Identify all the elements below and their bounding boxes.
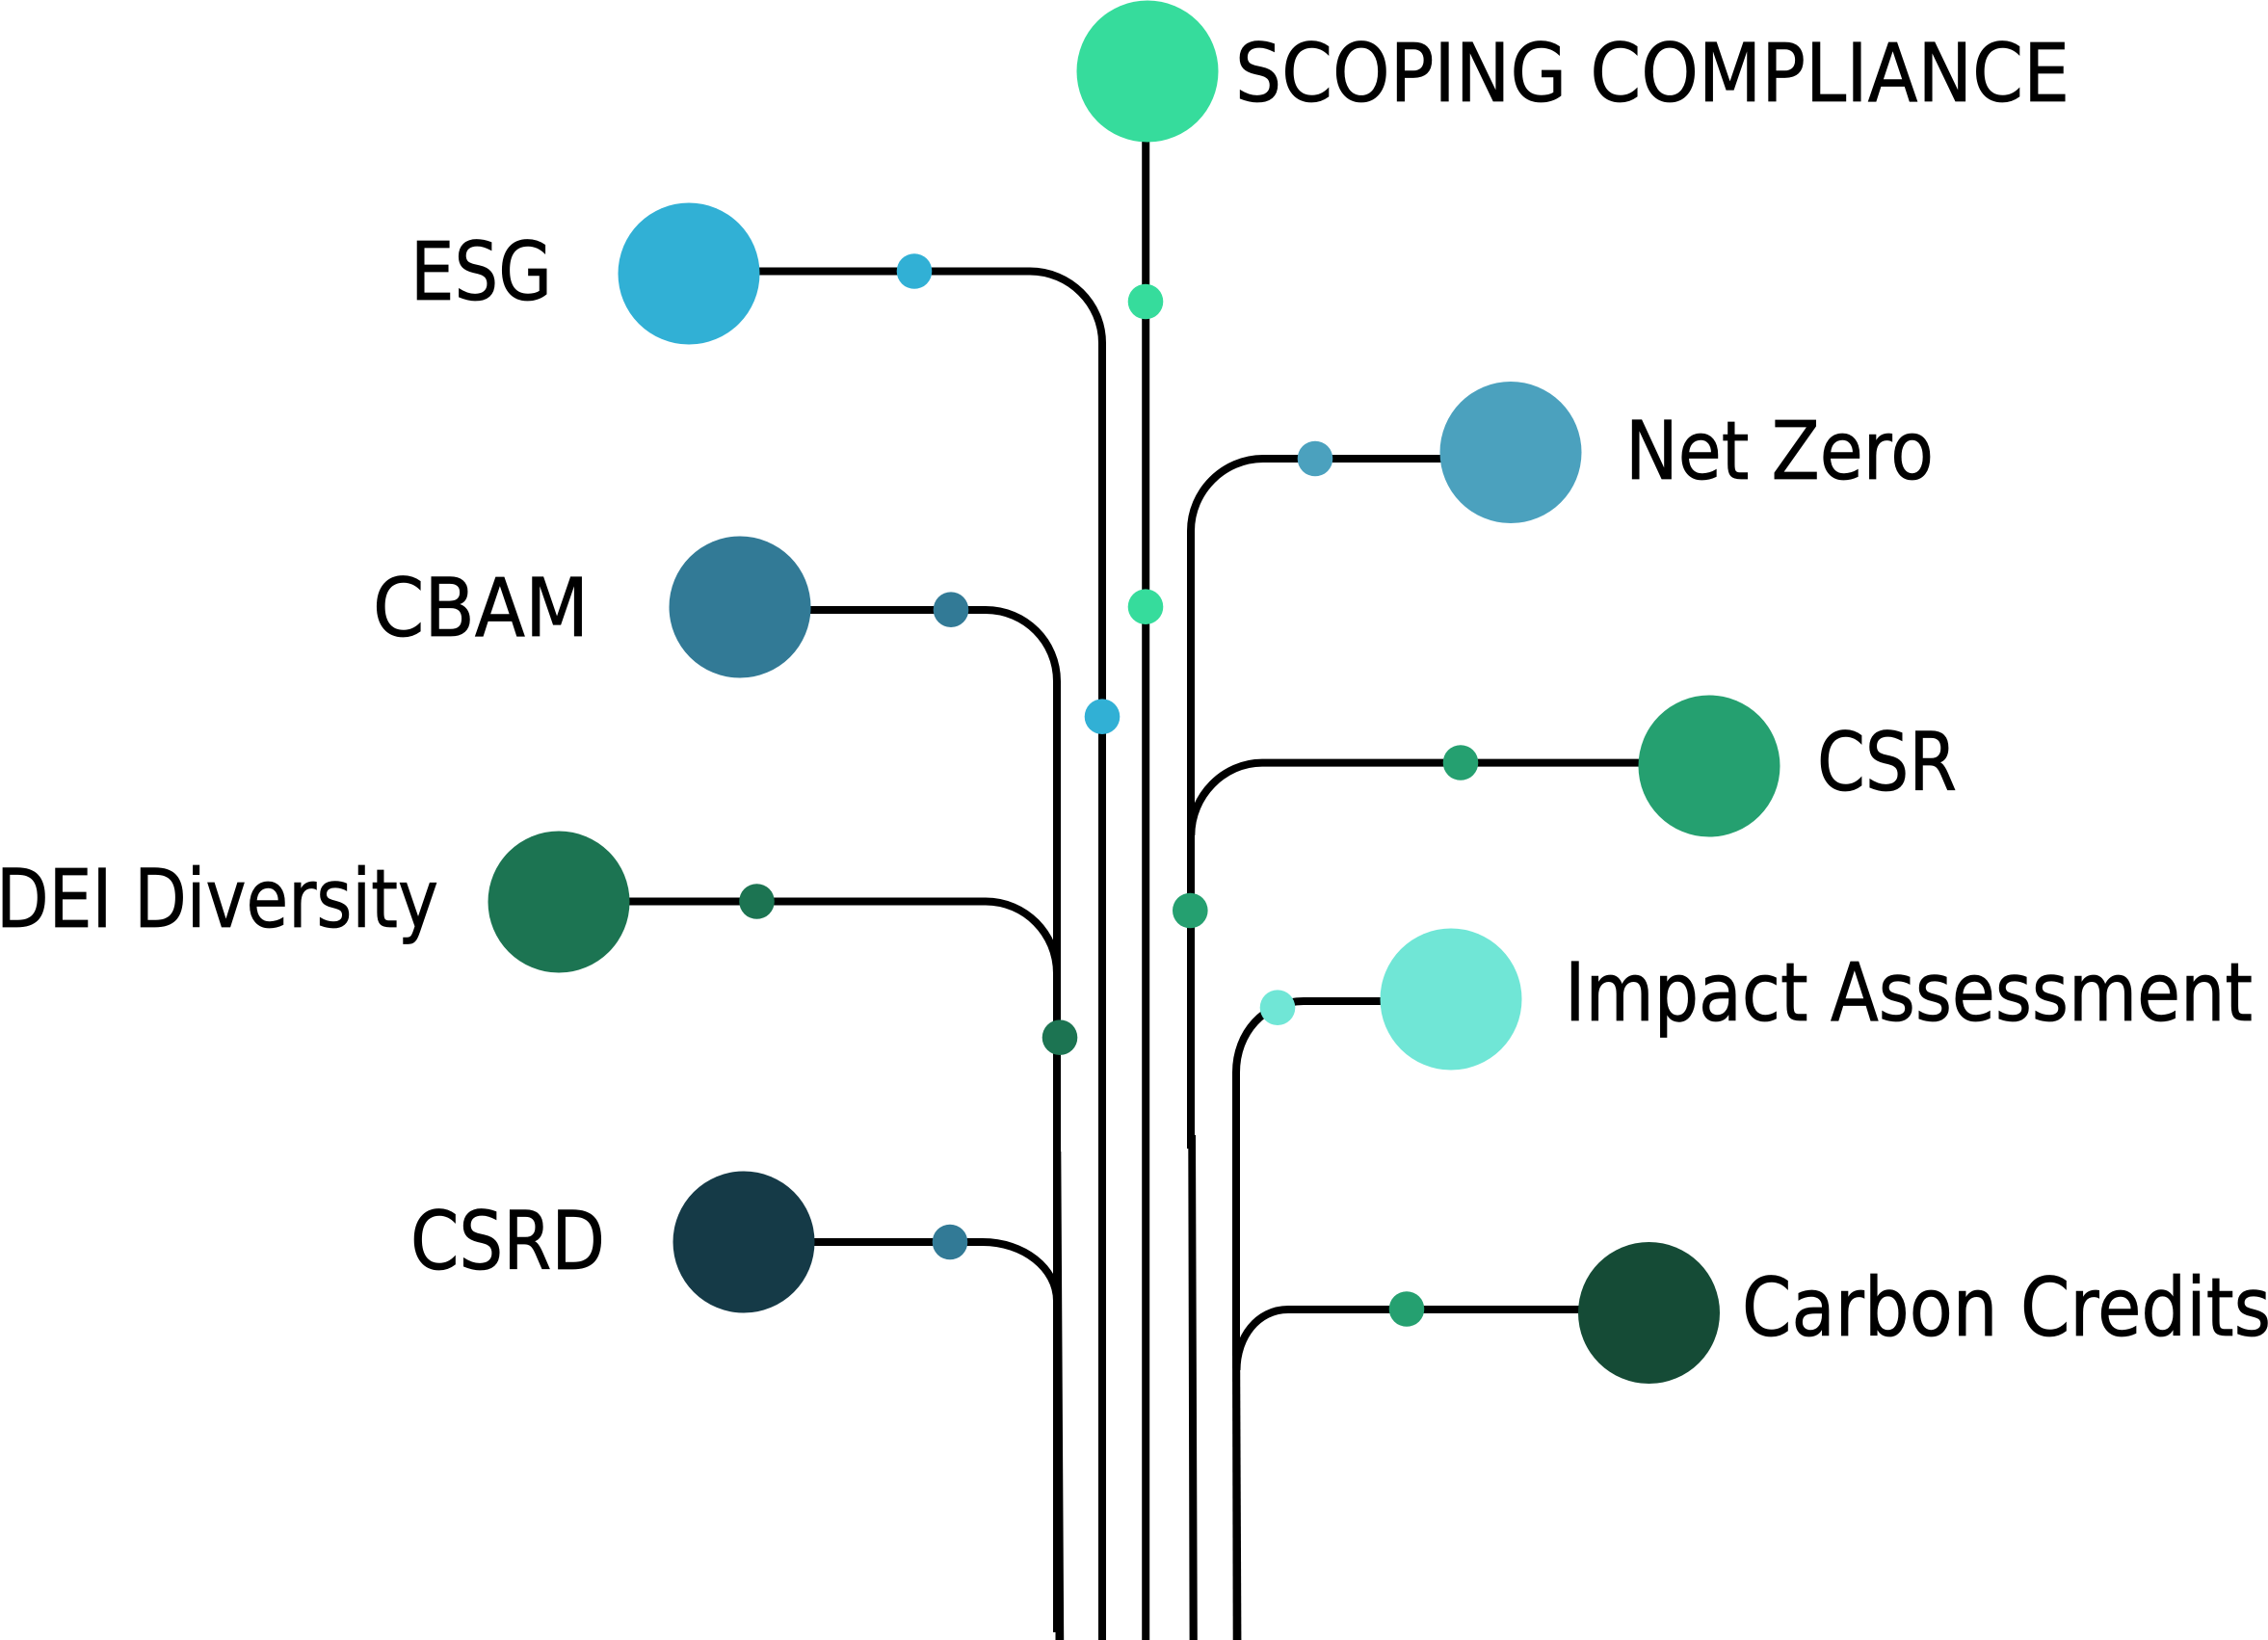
dot: trunk lower bbox=[1128, 589, 1163, 624]
node: Scoping Compliance bbox=[1077, 0, 1218, 143]
label: CSRD: CSRD bbox=[410, 1194, 605, 1288]
line: Impact Assessment bbox=[1232, 1001, 1387, 1640]
label: DEI Diversity: DEI Diversity bbox=[0, 852, 438, 946]
node: DEI Diversity bbox=[488, 831, 630, 973]
label: CSR: CSR bbox=[1817, 715, 1957, 809]
line: Carbon Credits bbox=[1237, 1309, 1585, 1370]
line: CSRD bbox=[809, 1242, 1057, 1301]
dot: CSRD branch bbox=[933, 1225, 967, 1259]
node: Impact Assessment bbox=[1380, 929, 1522, 1070]
dot: CBAM branch bbox=[934, 592, 968, 627]
dot: Impact branch bbox=[1260, 990, 1295, 1025]
line: DEI Diversity bbox=[626, 902, 1057, 973]
dot: Carbon Credits branch bbox=[1389, 1291, 1424, 1327]
line: Net Zero bbox=[1187, 459, 1445, 1640]
node: Net Zero bbox=[1439, 382, 1582, 523]
dot: Net Zero branch bbox=[1298, 441, 1332, 476]
dot: ESG branch bbox=[897, 253, 932, 289]
node: CSRD bbox=[672, 1172, 815, 1312]
dot: DEI vertical bbox=[1042, 1019, 1077, 1055]
node: Carbon Credits bbox=[1578, 1242, 1720, 1384]
dot: DEI branch bbox=[739, 884, 775, 919]
node: CBAM bbox=[669, 536, 811, 678]
label: CBAM: CBAM bbox=[373, 561, 589, 655]
label: Scoping Compliance: SCOPING COMPLIANCE bbox=[1235, 26, 2070, 120]
dot: CSR branch bbox=[1443, 745, 1478, 780]
label: ESG: ESG bbox=[410, 225, 552, 319]
line: CSR bbox=[1191, 763, 1643, 835]
dot: CSR vertical bbox=[1173, 893, 1208, 928]
line: CBAM bbox=[804, 610, 1064, 1640]
node: ESG bbox=[619, 202, 759, 345]
line: Scoping Compliance trunk bbox=[1142, 135, 1149, 1640]
line: ESG bbox=[752, 272, 1102, 1640]
dot: ESG vertical bbox=[1085, 699, 1120, 734]
label: Net Zero: Net Zero bbox=[1625, 404, 1934, 498]
node: CSR bbox=[1638, 696, 1780, 836]
dot: trunk upper bbox=[1128, 284, 1163, 319]
